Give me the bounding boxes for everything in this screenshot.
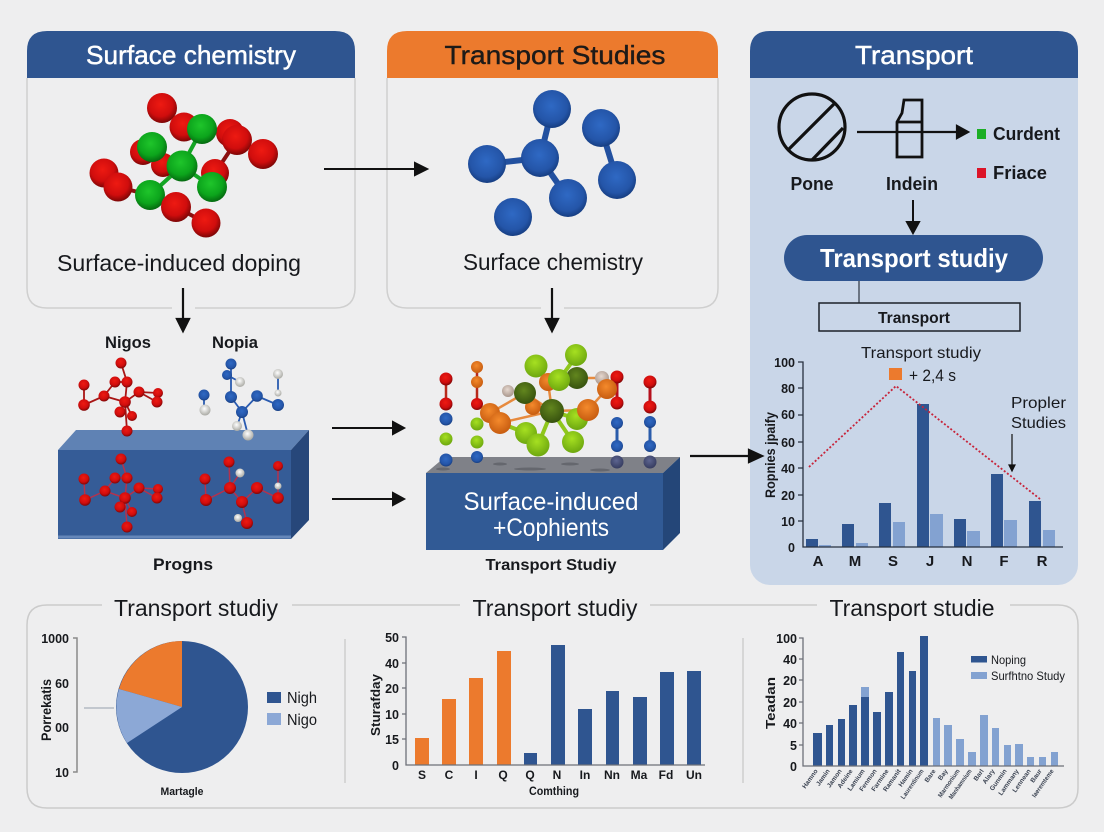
pie axis: Porrekatis — [39, 679, 54, 741]
orange bars — [415, 651, 511, 765]
x labels: Q — [498, 768, 508, 782]
divider one — [344, 639, 346, 783]
label: pone: Pone — [790, 174, 834, 194]
arrow: lower slab link — [332, 493, 404, 505]
x axis labels: F — [999, 553, 1009, 570]
rotated x labels: Farmine — [870, 768, 891, 793]
arrow: down to transport study — [907, 200, 919, 233]
rotated x labels: Ramanit — [882, 767, 903, 793]
y labels: 10 — [385, 708, 399, 722]
y labels: 20 — [783, 696, 797, 710]
molecule: red and green — [90, 93, 278, 238]
y axis labels: 40 — [781, 462, 795, 476]
pie slices — [116, 641, 248, 773]
molecule cluster — [480, 344, 617, 456]
pie axis: 1000 — [41, 632, 69, 646]
x axis labels: J — [926, 553, 934, 570]
molecule: red embedded left — [78, 454, 163, 532]
rotated x labels: Iaeremteme — [1031, 768, 1056, 799]
chart legend: Noping — [991, 653, 1026, 667]
x labels: S — [418, 768, 426, 782]
rotated x labels: Barl — [973, 768, 986, 783]
rotated x labels: Adeine — [836, 768, 855, 790]
rotated x labels: Alary — [982, 768, 997, 785]
chart key — [889, 366, 956, 385]
panel: bottom charts — [27, 595, 1078, 808]
x labels: I — [474, 768, 478, 782]
molecule columns — [440, 361, 656, 468]
arrow: to chart — [690, 450, 762, 462]
y labels: 40 — [783, 717, 797, 731]
label: indein: Indein — [886, 174, 938, 194]
legend: curdent: Curdent — [993, 124, 1060, 144]
x axis labels: M — [849, 553, 861, 570]
pie caption: Martagle — [160, 786, 204, 798]
y axis labels — [774, 356, 795, 555]
dark bars — [806, 404, 1041, 547]
pie axis: 00 — [55, 721, 69, 735]
y labels — [368, 631, 399, 773]
x axis labels: A — [813, 553, 824, 570]
annotation: propler studies: Propler — [1011, 395, 1067, 412]
y axis labels: 80 — [781, 382, 795, 396]
heading: surface chemistry: Surface chemistry — [86, 40, 296, 70]
dark bars — [813, 636, 928, 766]
x labels: N — [553, 768, 561, 782]
y labels: 40 — [385, 657, 399, 671]
light bars — [861, 687, 1058, 766]
axes — [798, 362, 1063, 547]
rotated x labels: Hamno — [801, 768, 820, 790]
rotated x labels: Lamium — [847, 768, 867, 793]
rotated x labels: Manhamnium — [948, 768, 974, 801]
caption: progns: Progns — [153, 555, 213, 574]
labels: nigos: Nigos — [105, 333, 151, 352]
annotation: propler studies — [1009, 395, 1067, 471]
pie axis — [39, 632, 114, 780]
rotated x labels: Fenmon — [858, 768, 879, 793]
arrow: upper slab link — [332, 422, 404, 434]
bar chart: orange and blue — [368, 631, 705, 798]
diagram: surface-induced slab — [426, 344, 680, 574]
panel: transport — [750, 31, 1078, 585]
molecule: blue — [468, 90, 636, 236]
molecule: red embedded right — [200, 456, 284, 529]
y labels — [763, 632, 797, 774]
x axis labels: S — [888, 553, 898, 570]
y axis title: Ropnies jpaify — [763, 412, 778, 498]
y labels: 100 — [776, 632, 797, 646]
slab text — [464, 488, 638, 542]
diagram: doped slab — [58, 333, 309, 574]
rotated x labels: Bay — [937, 768, 950, 782]
x axis labels: R — [1037, 553, 1048, 570]
rotated x labels: Jamin — [815, 768, 832, 788]
legend: friace: Friace — [993, 163, 1047, 183]
pie legend — [267, 690, 317, 729]
blue bars — [524, 645, 701, 765]
axes — [799, 638, 1064, 766]
slab text: +Cophients — [493, 514, 609, 542]
x labels: Fd — [659, 768, 673, 782]
rotated x labels: Hamin — [898, 768, 915, 788]
x axis labels — [813, 553, 1048, 570]
y labels: 0 — [392, 759, 399, 773]
x labels: C — [445, 768, 454, 782]
chart legend — [971, 653, 1065, 683]
icon: indein block — [897, 100, 922, 157]
panel: transport studies — [387, 31, 718, 308]
arrow: indein to legend — [857, 126, 968, 138]
caption: surface chemistry: Surface chemistry — [463, 249, 643, 275]
divider two — [742, 638, 744, 783]
rotated x labels: Jamon — [826, 768, 844, 789]
molecule: red upper — [78, 358, 163, 436]
chart title: Transport studiy — [861, 345, 981, 362]
arrow: surface doping down — [177, 288, 189, 331]
y labels: Teadan — [763, 677, 778, 729]
x labels: Un — [686, 768, 702, 782]
slab block — [426, 457, 680, 550]
y axis labels: 60 — [781, 408, 795, 422]
rotated x labels: Lammany — [997, 768, 1021, 797]
y axis labels: 0 — [788, 541, 795, 555]
panel: surface chemistry — [27, 31, 355, 308]
labels: nopia: Nopia — [212, 333, 259, 352]
connector line — [858, 281, 860, 303]
x labels: In — [580, 768, 590, 782]
x labels — [418, 768, 702, 782]
pie legend: Nigh — [287, 690, 317, 707]
heading: chart one: Transport studiy — [114, 595, 278, 621]
pie axis: 10 — [55, 766, 69, 780]
x axis labels: N — [962, 553, 972, 570]
header: surface chemistry — [27, 31, 355, 78]
heading: transport studies: Transport Studies — [444, 40, 666, 70]
box: transport: Transport — [878, 310, 951, 327]
heading: chart three: Transport studie — [830, 595, 994, 621]
y labels: 15 — [385, 733, 399, 747]
rotated x labels: Laurentinum — [900, 768, 926, 801]
heading: transport: Transport — [855, 40, 974, 70]
y labels: 20 — [385, 682, 399, 696]
y axis labels: 10 — [781, 515, 795, 529]
y axis labels: 60 — [781, 436, 795, 450]
y labels: Sturafday — [368, 673, 383, 736]
annotation: propler studies: Studies — [1011, 415, 1066, 432]
bar chart: transport study — [763, 345, 1067, 570]
y labels: 5 — [790, 739, 797, 753]
trend line — [809, 386, 1040, 499]
axes — [402, 637, 705, 765]
y axis labels: 100 — [774, 356, 795, 370]
slab text: Surface-induced — [464, 488, 638, 516]
arrow: panel one to panel two — [324, 163, 427, 175]
rotated x labels: Marmonium — [937, 768, 962, 799]
y labels: 40 — [783, 653, 797, 667]
rotated x labels — [801, 767, 1056, 801]
bar chart: noping and surface study — [763, 632, 1065, 801]
rotated x labels: Bare — [924, 768, 938, 784]
icon: pone circle — [779, 94, 845, 160]
y labels: 20 — [783, 674, 797, 688]
y labels: 50 — [385, 631, 399, 645]
x labels: Q — [525, 768, 535, 782]
pie axis: 60 — [55, 677, 69, 691]
header: transport studies — [387, 31, 718, 78]
x labels: Nn — [604, 768, 620, 782]
rotated x labels: Baur — [1029, 768, 1044, 784]
caption: transport study: Transport Studiy — [486, 557, 617, 574]
arrow: surface chemistry down — [546, 288, 558, 331]
box: transport — [819, 303, 1020, 331]
molecule: blue and white — [198, 358, 284, 440]
light bars — [819, 514, 1055, 547]
x labels: Ma — [631, 768, 648, 782]
pie chart — [39, 632, 317, 798]
header: transport — [750, 31, 1078, 78]
pill: transport study: Transport studiy — [820, 243, 1008, 273]
heading: chart two: Transport studiy — [472, 595, 638, 621]
pill: transport study — [784, 235, 1043, 281]
chart legend: Surfhtno Study — [991, 669, 1065, 683]
rotated x labels: Lennean — [1012, 768, 1033, 794]
y axis labels: 20 — [781, 489, 795, 503]
x title: Comthing — [529, 784, 579, 798]
rotated x labels: Gunmin — [989, 768, 1009, 792]
chart key: + 2,4 s — [909, 366, 956, 385]
y labels: 0 — [790, 760, 797, 774]
pie legend: Nigo — [287, 712, 317, 729]
caption: surface-induced doping: Surface-induced doping — [57, 250, 301, 276]
slab block — [58, 430, 309, 539]
